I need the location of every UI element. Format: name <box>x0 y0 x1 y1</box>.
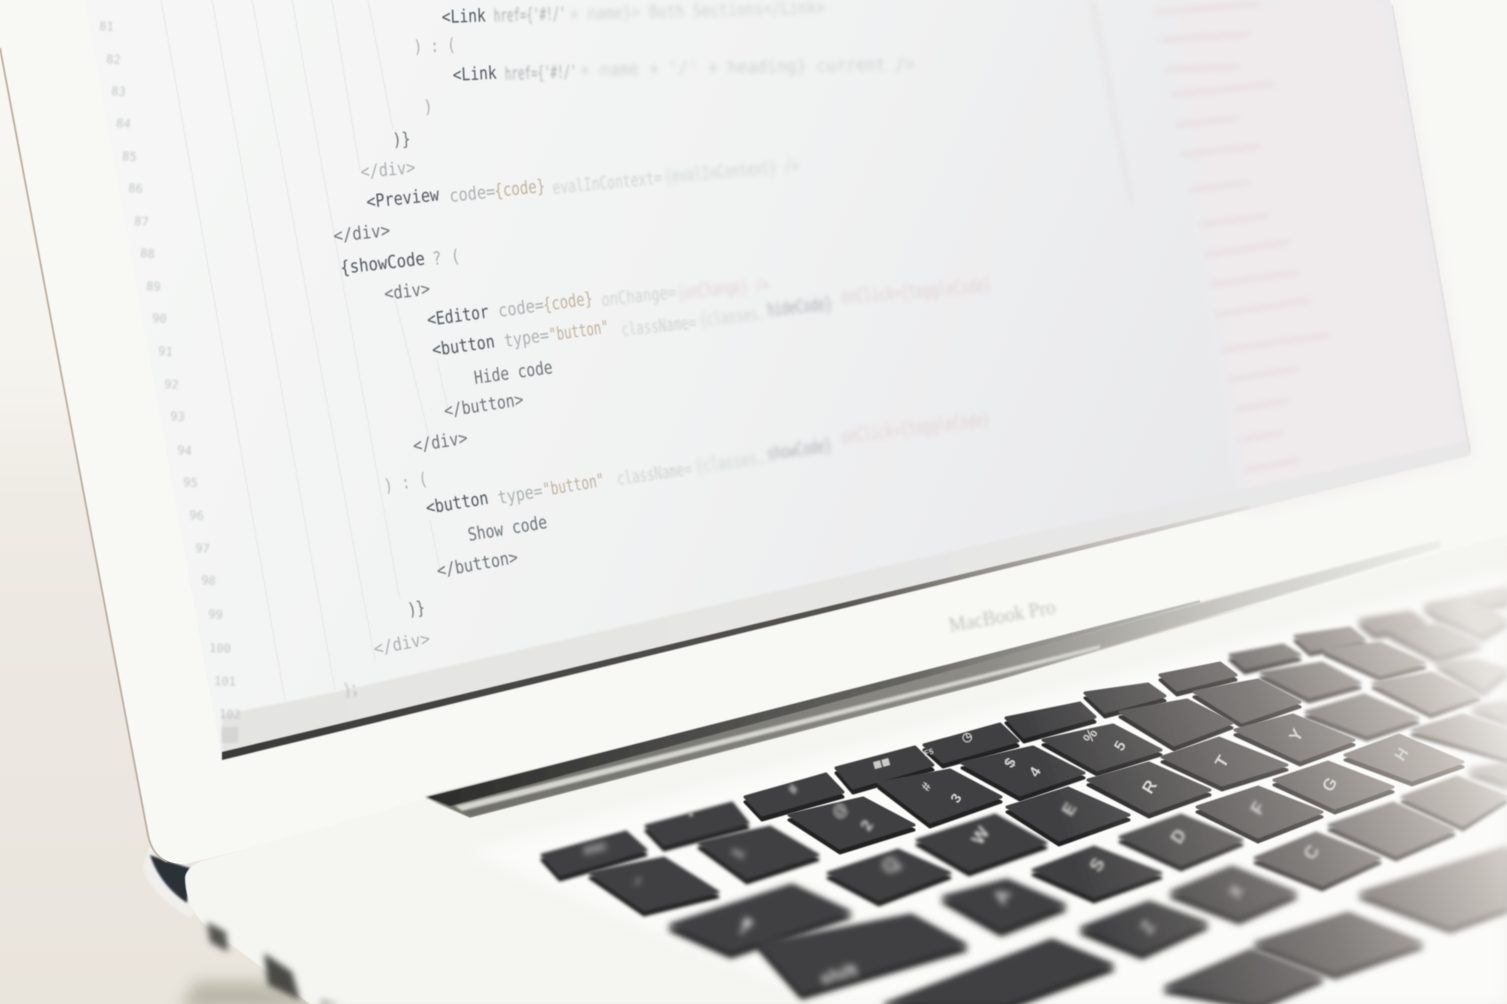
code: slightly defocused text: href={'#!/' <box>493 3 566 27</box>
line numbers: 92 <box>164 377 179 392</box>
shadow under laptop <box>180 982 340 1004</box>
key legends: in focus: # <box>918 779 935 794</box>
code: in-focus text: {showCode <box>339 248 426 279</box>
slot dark line <box>428 600 1200 806</box>
code: in-focus text: <button <box>424 488 490 519</box>
hinge slot <box>425 540 1440 818</box>
code: in-focus text: </div> <box>372 628 432 660</box>
code: in-focus text: {code} <box>493 176 546 202</box>
key legends: defocused: esc <box>582 836 609 858</box>
key legends: defocused: X <box>1224 881 1248 902</box>
key legends: defocused: 1 <box>729 845 748 862</box>
code: in-focus text: ) : ( <box>413 35 456 58</box>
gutter line 1 <box>1092 0 1132 205</box>
minimap code streaks <box>1155 4 1330 470</box>
key legends: defocused <box>582 836 1248 989</box>
line numbers: 102 <box>219 707 241 722</box>
key legends: mid focus: F <box>1246 798 1269 818</box>
code: in-focus text: </div> <box>332 220 391 247</box>
line numbers: 101 <box>214 674 236 689</box>
line numbers: 96 <box>189 508 204 523</box>
code: in-focus text: <Editor <box>426 302 490 331</box>
code: in-focus text: "button" <box>548 317 610 346</box>
key legends: mid focus <box>685 781 1323 875</box>
code: in-focus text: "button" <box>541 470 606 501</box>
port 2 <box>264 953 300 1000</box>
screen surface <box>85 0 1470 760</box>
key legends: defocused: ~ <box>629 873 648 890</box>
code: out-of-focus text: {classes. <box>694 447 766 478</box>
line numbers: 83 <box>111 84 126 99</box>
screen <box>85 0 1470 760</box>
line numbers: 99 <box>208 607 223 622</box>
key legends: in focus: F5 <box>923 747 935 758</box>
MacBook logo text: MacBook Pro <box>947 595 1057 637</box>
code: in-focus text: <button <box>431 331 496 361</box>
code: out-of-focus text: {classes. <box>698 303 766 331</box>
line numbers: 85 <box>122 149 137 164</box>
code: in-focus text: Show code <box>466 512 549 546</box>
keyboard well <box>470 570 1507 1004</box>
code: in-focus text: {code} <box>542 288 594 316</box>
code: in-focus text: code= <box>497 295 545 322</box>
line numbers: 95 <box>183 475 198 490</box>
key legends: defocused: A <box>990 885 1016 909</box>
line numbers: 88 <box>140 246 155 261</box>
line numbers: 81 <box>99 19 114 34</box>
code: in-focus text: ) <box>423 96 433 118</box>
code: out-of-focus text: {onChange} /> <box>676 274 770 304</box>
code: in-focus text: <div> <box>383 278 431 305</box>
code: in-focus text: </div> <box>360 157 416 183</box>
line numbers: 97 <box>195 541 210 556</box>
code: slightly defocused text: className= <box>616 459 693 490</box>
keys: mid focus, sides <box>542 633 1507 915</box>
line numbers: 86 <box>128 181 143 196</box>
code: in-focus text: </button> <box>435 547 520 582</box>
key legends: in focus: ▦▦ <box>872 756 891 770</box>
key legends: in focus: $ <box>1001 754 1020 771</box>
key legends: mid focus: W <box>967 823 993 848</box>
line numbers: 91 <box>158 344 173 359</box>
slot metal strip <box>425 540 1440 818</box>
key legends: mid focus: D <box>1166 825 1190 847</box>
key legends: mid focus: S <box>1085 854 1109 875</box>
code: in-focus text: ? ( <box>431 246 461 270</box>
key legends: defocused: ⇥ <box>729 912 760 941</box>
line numbers: 100 <box>209 641 231 656</box>
slot highlight <box>455 645 1100 811</box>
indent guides <box>161 0 448 700</box>
code: out-of-focus text: hideCode} <box>766 293 833 321</box>
key legends: mid focus: * <box>685 809 701 822</box>
code: in-focus text: <Preview <box>365 184 440 213</box>
key legends: defocused: Z <box>1136 917 1159 937</box>
keys: heavily defocused, sides <box>670 593 1507 1004</box>
code: in-focus text: type= <box>496 481 544 509</box>
key legends: in focus: H <box>1392 745 1413 764</box>
line numbers: 84 <box>116 116 131 131</box>
line numbers <box>99 19 241 722</box>
code: slightly defocused text: evalInContext= <box>551 168 663 199</box>
code: out-of-focus text <box>570 0 992 478</box>
ports <box>207 922 340 1004</box>
code: out-of-focus text: {evalInContext} /> <box>664 155 800 188</box>
key legends: mid focus: # <box>784 781 802 797</box>
keys: in focus <box>745 663 1463 848</box>
key legends: mid focus: C <box>1299 841 1323 863</box>
line numbers: 94 <box>177 443 192 458</box>
screen right edge highlight <box>1392 5 1470 452</box>
keys: mid focus <box>542 628 1507 910</box>
key legends: in focus: R <box>1138 777 1161 797</box>
code: slightly defocused text: href={'#!/' <box>504 61 577 85</box>
key legends: in focus: % <box>1080 726 1101 746</box>
line numbers: 93 <box>170 409 185 424</box>
key legends: in focus: Y <box>1285 725 1308 745</box>
key legends: in focus: 4 <box>1026 763 1045 780</box>
code: out-of-focus text: onClick={toggleCode} <box>841 275 992 308</box>
keys: heavily defocused <box>670 588 1507 1004</box>
key legends: mid focus: 2 <box>858 817 877 834</box>
code: out-of-focus text: onClick={toggleCode} <box>840 409 991 448</box>
key legends: defocused: shift <box>818 960 860 989</box>
status bar icon <box>222 727 238 743</box>
line numbers: 98 <box>201 573 216 588</box>
port 1 <box>207 922 228 952</box>
key legends: mid focus: E <box>1058 799 1080 819</box>
code: in-focus text: )} <box>406 597 427 621</box>
editor gutter <box>1092 0 1132 205</box>
code: slightly defocused text: onChange= <box>600 282 677 311</box>
code: in-focus text: <Link <box>452 63 497 86</box>
line numbers: 82 <box>106 52 121 67</box>
code: slightly defocused text: className= <box>620 312 697 341</box>
key legends: in focus: 3 <box>947 790 965 806</box>
code: slightly defocused text: ); <box>342 678 360 701</box>
key legends: in focus: G <box>1318 774 1341 795</box>
hinge corner <box>143 845 200 918</box>
laptop base <box>185 535 1507 1004</box>
lid outer edge <box>0 48 167 862</box>
key legends: defocused: Q <box>878 853 904 878</box>
code: in-focus text: )} <box>392 129 411 151</box>
key legends: mid focus: @ <box>829 800 852 822</box>
key legends: in focus: 5 <box>1111 738 1130 754</box>
editor side panel tint <box>1170 0 1470 510</box>
key legends: in focus: T <box>1211 752 1233 771</box>
code: in-focus text: code= <box>448 181 496 207</box>
code: out-of-focus text: showCode} <box>766 435 833 465</box>
code: in-focus text: ) : ( <box>382 469 429 497</box>
keyboard <box>542 588 1507 1004</box>
screen lower black edge <box>222 505 1250 760</box>
code: in-focus text: Hide code <box>473 357 554 389</box>
code: slightly defocused text <box>342 3 697 701</box>
line numbers: 90 <box>152 311 167 326</box>
code: in-focus text: </div> <box>411 428 469 457</box>
port 3 <box>320 1000 340 1004</box>
key legends: in focus: ◷ <box>960 729 974 745</box>
line numbers: 87 <box>134 214 149 229</box>
status bar band <box>222 440 1470 760</box>
line numbers: 89 <box>146 279 161 294</box>
keys: in focus, sides <box>745 668 1463 853</box>
code: in-focus text: </button> <box>443 389 525 422</box>
code: out-of-focus text: + name + '/' + heading} current /> <box>580 54 915 81</box>
code: in-focus text <box>332 5 610 660</box>
code: in-focus text: <Link <box>441 5 486 28</box>
key legends: in focus <box>872 725 1413 806</box>
code: in-focus text: type= <box>503 325 550 352</box>
